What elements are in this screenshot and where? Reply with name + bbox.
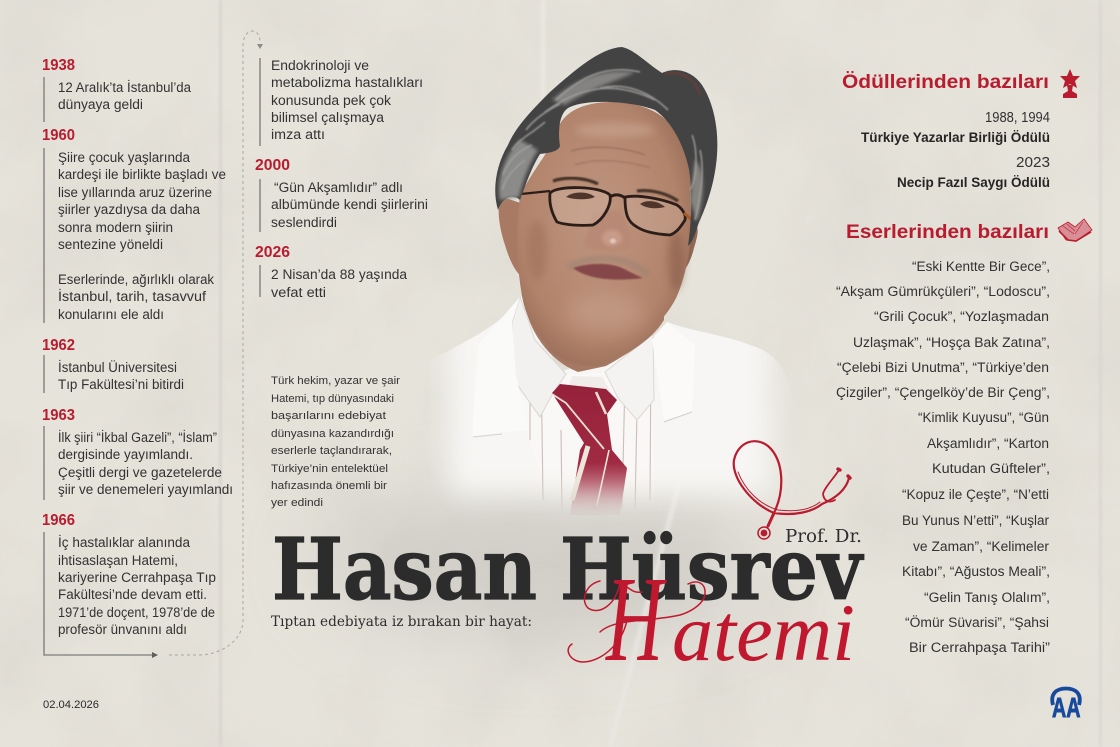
entry 1963: şiir ve denemeleri yayımlandı	[58, 482, 233, 497]
intro paragraph: yer edindi	[271, 497, 323, 509]
timeline column 2	[255, 58, 428, 300]
entry 1960: İstanbul, tarih, tasavvuf	[58, 289, 206, 304]
timeline column 1	[42, 31, 263, 658]
list of works: “Gelin Tanış Olalım”,	[924, 590, 1050, 605]
entry 1960: şiirler yazdıysa da daha	[58, 202, 200, 217]
entry 1966	[42, 512, 216, 637]
list of works: Uzlaşmak”, “Hoşça Bak Zatına”,	[853, 335, 1050, 350]
list of works: “Kimlik Kuyusu”, “Gün	[918, 410, 1049, 425]
entry 1966: Fakültesi’nde devam etti.	[58, 587, 207, 602]
date: 02.04.2026	[43, 699, 99, 711]
entry 2000: albümünde kendi şiirlerini	[271, 197, 428, 212]
list of works: “Ömür Süvarisi”, “Şahsi	[905, 615, 1049, 630]
entry 1938	[42, 57, 191, 112]
logo: Anadolu Agency: AA	[1052, 692, 1080, 723]
title name	[272, 520, 864, 620]
entry continuation 1966: Endokrinoloji ve	[271, 58, 369, 73]
list of works: Bu Yunus N’etti”, “Kuşlar	[902, 513, 1049, 528]
list of works: Bir Cerrahpaşa Tarihi”	[909, 640, 1050, 655]
entry continuation 1966: bilimsel çalışmaya	[271, 110, 385, 125]
entry 2000: “Gün Akşamlıdır” adlı	[274, 180, 403, 195]
hair	[495, 47, 717, 246]
entry continuation 1966	[271, 58, 423, 142]
intro paragraph: Hatemi, tıp dünyasındaki	[271, 393, 394, 405]
entry 2026: vefat etti	[271, 285, 326, 300]
award 1	[861, 110, 1050, 145]
entry 2000	[255, 157, 428, 230]
entry 1938: 12 Aralık’ta İstanbul’da	[58, 80, 191, 95]
necktie	[552, 384, 627, 515]
entry 1966: 1971’de doçent, 1978’de de	[58, 605, 215, 620]
entry 1960: 1960	[42, 127, 75, 144]
entry 1962: 1962	[42, 337, 75, 354]
subtitle: Tıptan edebiyata iz bırakan bir hayat:	[271, 614, 532, 630]
icon: star trophy	[1060, 69, 1080, 98]
icon: open book	[1058, 219, 1092, 241]
timeline axis and arrow	[44, 31, 263, 658]
entry 1960: lise yıllarında aruz üzerine	[58, 185, 212, 200]
award 2: 2023	[1016, 155, 1050, 171]
panel: works	[836, 219, 1092, 655]
entry 1962: Tıp Fakültesi’ni bitirdi	[58, 377, 184, 392]
entry 2026: 2026	[255, 244, 290, 261]
list of works: Kutudan Güfteler”,	[932, 461, 1050, 476]
entry 1966: ihtisaslaşan Hatemi,	[58, 553, 178, 568]
list of works: “Grili Çocuk”, “Yozlaşmadan	[874, 309, 1049, 324]
entry 2026	[255, 244, 407, 300]
award 1: 1988, 1994	[985, 110, 1050, 126]
glasses	[521, 188, 692, 235]
intro paragraph: başarılarını edebiyat	[271, 410, 387, 422]
panel: awards	[842, 69, 1080, 190]
logo: Anadolu Agency	[1052, 688, 1080, 723]
entry 1963	[42, 407, 233, 497]
award 2: Necip Fazıl Saygı Ödülü	[897, 175, 1050, 190]
awards heading: Ödüllerinden bazıları	[842, 72, 1049, 93]
intro paragraph: hafızasında önemli bir	[271, 480, 387, 492]
entry 1966: profesör ünvanını aldı	[58, 622, 187, 637]
ears	[499, 197, 698, 277]
entry continuation 1966: imza attı	[271, 127, 325, 142]
entry 1966: 1966	[42, 512, 75, 529]
list of works: Çizgiler”, “Çengelköy’de Bir Çeng”,	[836, 385, 1050, 400]
title name: Hasan	[272, 520, 537, 620]
face	[517, 102, 692, 366]
entry 1963: İlk şiiri “İkbal Gazeli”, “İslam”	[58, 430, 217, 445]
list of works: Kitabı”, “Ağustos Meali”,	[902, 564, 1050, 579]
intro paragraph: eserlerle taçlandırarak,	[271, 445, 392, 457]
entry 1960: Eserlerinde, ağırlıklı olarak	[58, 272, 214, 287]
intro paragraph: Türkiye’nin entelektüel	[271, 463, 388, 475]
title block	[271, 441, 864, 687]
list of works: “Eski Kentte Bir Gece”,	[912, 259, 1050, 274]
entry 1960: sentezine yöneldi	[58, 237, 163, 252]
script surname: atemi	[672, 587, 855, 678]
list of works: Akşamlıdır”, “Karton	[927, 436, 1049, 451]
facial shading	[527, 123, 684, 332]
list of works	[836, 259, 1050, 655]
entry continuation 1966: konusunda pek çok	[271, 93, 391, 108]
entry 1938: 1938	[42, 57, 75, 74]
intro paragraph: dünyasına kazandırdığı	[271, 428, 394, 440]
entry 1960: kardeşi ile birlikte başladı ve	[58, 167, 226, 182]
script surname: H	[604, 552, 667, 687]
intro paragraph: Türk hekim, yazar ve şair	[271, 375, 400, 387]
entry 1963: dergisinde yayımlandı.	[58, 447, 193, 462]
works heading: Eserlerinden bazıları	[846, 222, 1049, 243]
list of works: “Kopuz ile Çeşte”, “N’etti	[902, 487, 1049, 502]
award 2	[897, 155, 1050, 190]
entry 2000: seslendirdi	[271, 215, 337, 230]
icon: stethoscope	[734, 441, 850, 539]
list of works: ve Zaman”, “Kelimeler	[913, 539, 1050, 554]
entry 1938: dünyaya geldi	[58, 97, 143, 112]
entry 1960: Şiire çocuk yaşlarında	[58, 150, 190, 165]
title prefix: Prof. Dr.	[785, 527, 862, 547]
entry 1966: İç hastalıklar alanında	[58, 535, 190, 550]
entry 1960: konularını ele aldı	[58, 307, 164, 322]
entry 1962: İstanbul Üniversitesi	[58, 360, 177, 375]
entry 1966: kariyerine Cerrahpaşa Tıp	[58, 570, 216, 585]
portrait photo of Hatemi	[440, 47, 780, 510]
script surname	[568, 552, 855, 687]
mouth	[573, 264, 643, 280]
entry 1960	[42, 127, 226, 322]
entry 2026: 2 Nisan’da 88 yaşında	[271, 267, 407, 282]
list of works: “Akşam Gümrükçüleri”, “Lodoscu”,	[836, 284, 1050, 299]
entry continuation 1966: metabolizma hastalıkları	[271, 75, 423, 90]
entry 1960: sonra modern şiirin	[58, 220, 173, 235]
intro paragraph	[271, 375, 400, 509]
white coat and shirt	[440, 296, 780, 510]
entry 1963: 1963	[42, 407, 75, 424]
entry 2000: 2000	[255, 157, 290, 174]
title name: Hüsrev	[560, 520, 864, 620]
neck	[524, 296, 664, 372]
entry 1963: Çeşitli dergi ve gazetelerde	[58, 465, 222, 480]
list of works: “Çelebi Bizi Unutma”, “Türkiye’den	[837, 360, 1049, 375]
entry 1962	[42, 337, 184, 392]
award 1: Türkiye Yazarlar Birliği Ödülü	[861, 130, 1050, 145]
